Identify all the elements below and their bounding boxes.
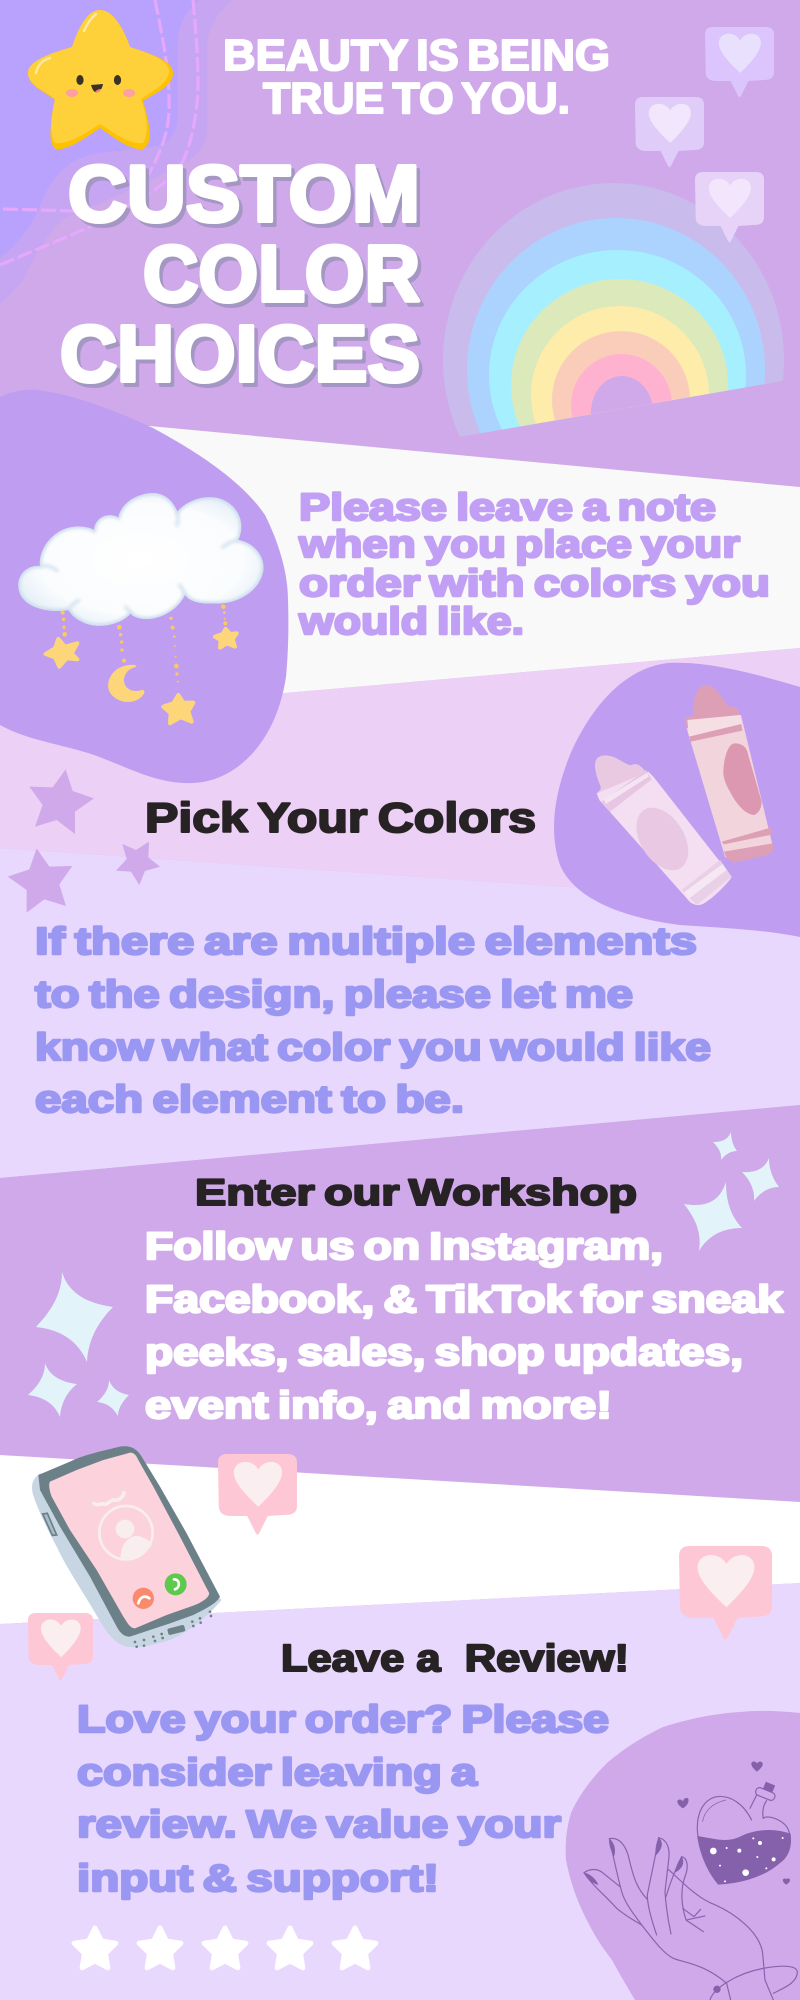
text block: multiple elements: to the design, please let me — [35, 974, 633, 1016]
icon: rose crayon — [685, 685, 773, 862]
icon: heart bubble 1 — [705, 27, 774, 97]
icon: smartphone call screen — [32, 1446, 222, 1648]
text block: follow us: peeks, sales, shop updates, — [145, 1332, 743, 1374]
text block: follow us: Follow us on Instagram, — [145, 1226, 663, 1268]
title: custom color choices: COLOR — [143, 229, 420, 318]
text block: note instructions: order with colors you — [299, 563, 770, 605]
heading: pick your colors: Pick Your Colors — [145, 794, 536, 841]
title: custom color choices: CHOICES — [60, 309, 420, 398]
heading: tagline: TRUE TO YOU. — [263, 74, 570, 123]
text block: note instructions: Please leave a note — [299, 487, 716, 529]
band: lavender review band — [0, 1583, 800, 2000]
text block: follow us — [145, 1226, 784, 1427]
text block: follow us: event info, and more! — [145, 1385, 612, 1427]
icon: heart bubble 2 — [635, 97, 704, 167]
icon: pink heart bubble right — [679, 1546, 772, 1640]
heading: tagline: BEAUTY IS BEING — [223, 31, 610, 80]
text block: follow us: Facebook, & TikTok for sneak — [145, 1279, 784, 1321]
text block: multiple elements — [35, 921, 711, 1121]
heading: leave a review: Leave a Review! — [281, 1638, 629, 1680]
icon: sparkles right — [684, 1132, 779, 1251]
icon: pink heart bubble left — [28, 1613, 93, 1681]
text block: review request: consider leaving a — [77, 1752, 478, 1794]
text block: note instructions: when you place your — [298, 524, 740, 566]
icon: hand holding heart potion — [584, 1762, 797, 2000]
icon: lavender stars — [8, 769, 160, 913]
icon: heart bubble 3 — [695, 172, 764, 242]
chart: pastel rainbow — [443, 183, 784, 437]
icon: sparkles left — [28, 1272, 129, 1417]
title: custom color choices — [60, 149, 420, 398]
text block: review request: review. We value your — [77, 1804, 561, 1846]
decorative dashed lines — [0, 0, 198, 265]
band: pink colors band — [0, 648, 800, 903]
band: white note band — [0, 412, 800, 718]
icon: five white rating stars — [74, 1928, 376, 1968]
title: custom color choices: CUSTOM — [68, 149, 420, 238]
text block: multiple elements: If there are multiple elements — [35, 921, 697, 963]
heading: tagline — [223, 31, 610, 123]
text block: multiple elements: know what color you would like — [35, 1027, 711, 1069]
band: white band — [0, 1455, 800, 1624]
text block: note instructions — [298, 487, 770, 643]
text block: review request — [77, 1699, 609, 1900]
icon: pale pink crayon — [595, 755, 732, 905]
text block: note instructions: would like. — [298, 601, 524, 643]
icon: pink heart bubble top — [218, 1454, 297, 1535]
band: purple workshop band — [0, 1105, 800, 1502]
text block: review request: input & support! — [77, 1858, 439, 1900]
text block: multiple elements: each element to be. — [35, 1079, 464, 1121]
band: lavender description band — [0, 848, 800, 1178]
icon: yellow kawaii star — [28, 10, 173, 149]
panel: potion blob — [566, 1711, 800, 2000]
icon: cloud mobile with stars and moon — [18, 493, 264, 723]
heading: enter our workshop: Enter our Workshop — [195, 1172, 637, 1213]
background: top left blobs — [0, 0, 233, 305]
panel: cloud blob — [0, 390, 288, 783]
text block: review request: Love your order? Please — [77, 1699, 609, 1741]
panel: crayon blob — [554, 663, 800, 937]
